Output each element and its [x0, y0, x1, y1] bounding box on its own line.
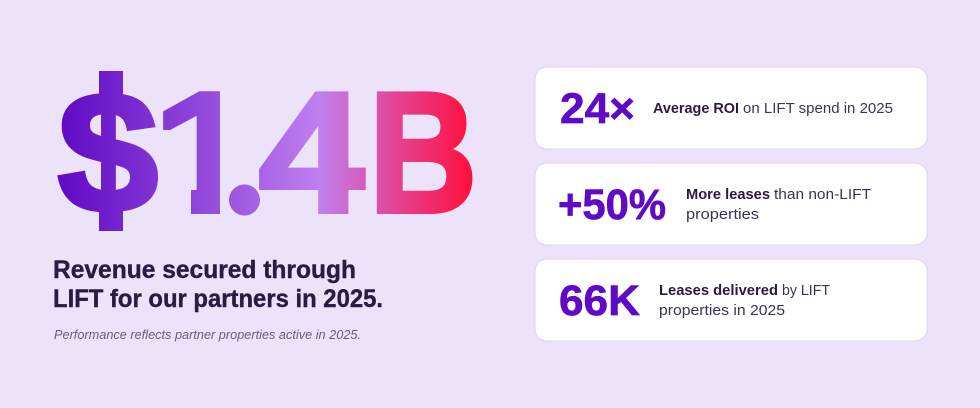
card: 66K leases delivered [535, 259, 927, 341]
label: leases delivered: by LIFT [782, 282, 830, 299]
headline figure: $ [58, 58, 158, 248]
label: leases delivered: Leases delivered [659, 282, 778, 299]
headline figure: 4 [259, 58, 364, 248]
card: +50% leases [535, 163, 927, 245]
heading: LIFT for our partners in 2025. [53, 285, 383, 313]
label: more leases: properties [686, 206, 759, 223]
stat: 24x: 24× [560, 85, 635, 133]
headline figure: . [231, 117, 258, 229]
label: more leases: than non-LIFT [774, 186, 871, 203]
headline figure: B [369, 58, 477, 248]
footnote: Performance reflects partner properties active in 2025. [54, 327, 361, 342]
heading [53, 256, 383, 313]
stat: +50%: +50% [558, 181, 666, 229]
label: more leases: More leases [686, 186, 770, 203]
headline figure [57, 71, 472, 231]
stat: 66K: 66K [559, 277, 640, 325]
label: leases delivered: properties in 2025 [659, 302, 785, 319]
headline figure: 1 [151, 54, 264, 250]
card: 24x ROI [535, 67, 927, 149]
label: average ROI: on LIFT spend in 2025 [743, 100, 893, 117]
label: average ROI: Average ROI [653, 100, 739, 117]
heading: Revenue secured through [53, 256, 356, 284]
